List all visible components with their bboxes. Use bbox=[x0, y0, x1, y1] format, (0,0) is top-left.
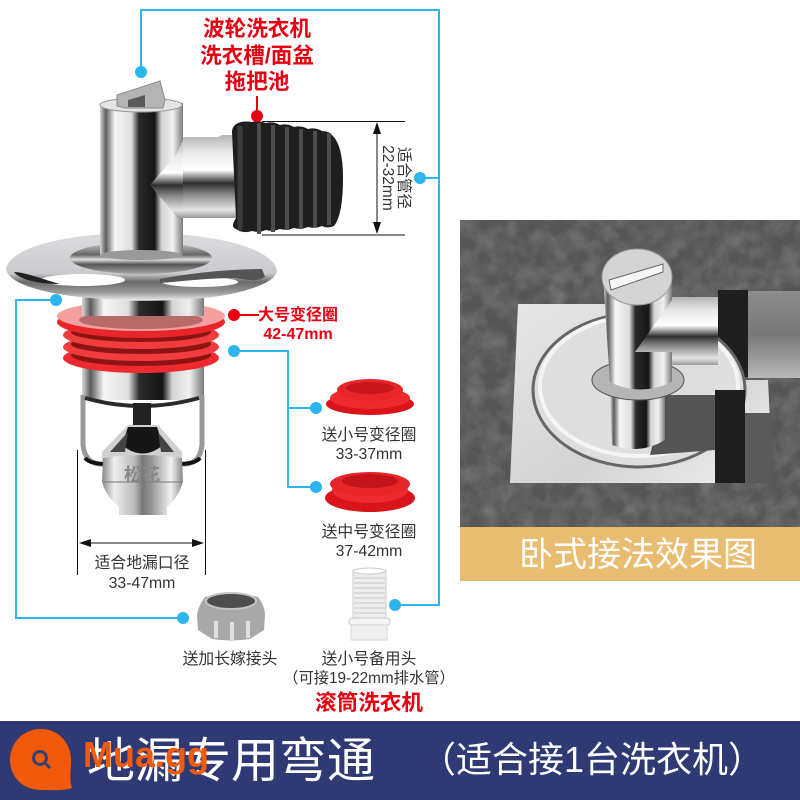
label: small ring bbox=[322, 426, 416, 463]
bottom float with logo: 松花 bbox=[124, 465, 160, 485]
connector dots bbox=[50, 66, 426, 624]
trap frame bbox=[83, 395, 202, 464]
label: pipe diameter: 适合管径 bbox=[395, 147, 413, 209]
red heading: applicable uses: 拖把池 bbox=[225, 69, 289, 94]
small red ring bbox=[326, 379, 414, 415]
red heading: applicable uses: 洗衣槽/面盆 bbox=[200, 43, 314, 68]
subtitle: （适合接1台洗衣机） bbox=[420, 739, 764, 780]
red callout: large ring: 42-47mm bbox=[263, 326, 333, 343]
red heading: applicable uses: 波轮洗衣机 bbox=[203, 16, 311, 41]
red label: drum washer: 滚筒洗衣机 bbox=[315, 690, 423, 715]
steel lower housing bbox=[82, 295, 204, 400]
valve body cylinder bbox=[100, 98, 183, 260]
label: spare adapter: （可接19-22mm排水管） bbox=[283, 670, 455, 687]
red heading: applicable uses bbox=[200, 16, 314, 122]
extension nut bbox=[197, 593, 265, 640]
chrome disc bbox=[533, 313, 745, 467]
valve cylinder bbox=[603, 277, 672, 390]
black rubber threaded connector bbox=[232, 121, 343, 234]
label: medium ring: 37-42mm bbox=[336, 543, 402, 560]
main title: 地漏专用弯通 bbox=[87, 735, 375, 788]
valve side arm bbox=[150, 135, 243, 218]
label: extension nut: 送加长嫁接头 bbox=[183, 650, 277, 668]
label: floor drain diameter: 适合地漏口径 bbox=[95, 554, 190, 572]
caption band bbox=[460, 527, 800, 581]
label: spare adapter bbox=[283, 650, 455, 687]
label: medium ring bbox=[322, 523, 416, 560]
red callout: large ring: 大号变径圈 bbox=[258, 305, 338, 324]
watermark text: Mua.gg bbox=[83, 734, 209, 775]
product: angle valve bbox=[6, 81, 343, 515]
dimension: floor drain diameter bbox=[78, 450, 206, 575]
dimension: pipe diameter bbox=[262, 122, 413, 235]
stem bbox=[133, 403, 151, 428]
side arm bbox=[635, 297, 718, 365]
valve handle bbox=[117, 81, 165, 108]
black ring bbox=[718, 290, 748, 377]
large red reducer ring bbox=[57, 297, 225, 373]
panel: installation photo bbox=[460, 220, 800, 527]
spare white adapter bbox=[349, 568, 390, 640]
reflection: lower plate bbox=[610, 390, 773, 483]
chrome cover disc bbox=[6, 233, 277, 301]
label: 22-32mm: 22-32mm bbox=[379, 145, 396, 211]
bottom title bar bbox=[0, 721, 800, 800]
steel floor plate bbox=[510, 304, 773, 483]
gray pipe bbox=[748, 291, 800, 378]
label: small ring: 送小号变径圈 bbox=[322, 426, 416, 444]
watermark bubble bbox=[10, 729, 72, 790]
label: spare adapter: 送小号备用头 bbox=[322, 650, 416, 668]
red callout: large ring bbox=[228, 305, 338, 343]
valve flange bbox=[592, 360, 684, 400]
valve cap bbox=[602, 249, 672, 305]
caption band: 卧式接法效果图 bbox=[519, 536, 757, 574]
label: small ring: 33-37mm bbox=[336, 446, 402, 463]
bottom float with logo bbox=[102, 455, 183, 515]
cone head bbox=[102, 425, 182, 462]
label: 33-47mm: 33-47mm bbox=[109, 575, 175, 592]
connector lines bbox=[16, 10, 439, 618]
medium red ring bbox=[325, 472, 415, 512]
stone background bbox=[460, 220, 800, 527]
label: medium ring: 送中号变径圈 bbox=[322, 523, 416, 541]
